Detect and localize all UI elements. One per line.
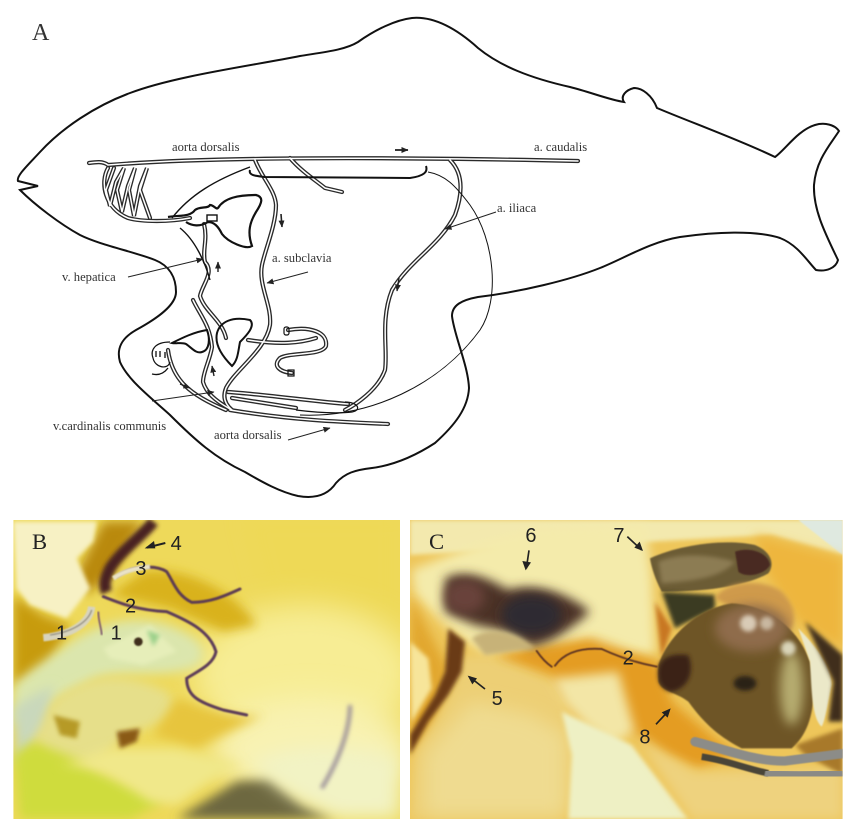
- vessel 2: [537, 649, 657, 667]
- leader arrows: [128, 150, 496, 440]
- vessel labels: aorta dorsalis: [172, 140, 240, 154]
- vessel labels: a. caudalis: [534, 140, 587, 154]
- vessel 2: [103, 597, 247, 715]
- forceps: [695, 742, 843, 761]
- number labels: 3: [135, 558, 146, 580]
- vessel labels: v. hepatica: [62, 270, 116, 284]
- number labels: 8: [639, 727, 650, 749]
- organs and thin vessels: [152, 166, 492, 415]
- photo tones: [410, 520, 843, 819]
- vessel labels: a. subclavia: [272, 251, 332, 265]
- number labels: [56, 533, 182, 645]
- vessels: black outer strokes: [89, 158, 578, 424]
- dark tissue 6: [445, 574, 590, 647]
- vessel labels: aorta dorsalis: [214, 428, 282, 442]
- panel label A: A: [32, 20, 50, 46]
- right dark and pale edges: [798, 628, 832, 727]
- vessel 3: [117, 567, 240, 602]
- fish body outline: [18, 18, 839, 497]
- number labels: 2: [125, 596, 136, 618]
- label B: B: [32, 529, 47, 554]
- pointer arrows: [469, 537, 669, 724]
- number labels: 4: [171, 533, 182, 555]
- vessels 1: [43, 607, 92, 638]
- panel A: fish circulatory diagram: [18, 18, 839, 497]
- arrow to vessel 4: [147, 543, 165, 548]
- number labels: 5: [492, 688, 503, 710]
- dark blood vessel 4: [105, 522, 153, 592]
- panel B: photograph of dissection: [13, 515, 413, 819]
- vessels: white inner strokes: [89, 158, 578, 424]
- organ 8: [658, 603, 814, 748]
- number labels: [492, 525, 650, 749]
- number labels: 1: [111, 623, 122, 645]
- photo tones: [13, 515, 413, 819]
- out-of-focus vessel: [322, 705, 350, 788]
- number labels: 1: [56, 623, 67, 645]
- dark vessel 5: [410, 628, 465, 755]
- organ 7: [650, 542, 772, 592]
- panel C: photograph of dissection: [410, 520, 843, 819]
- number labels: 7: [613, 525, 624, 547]
- vessel labels: v.cardinalis communis: [53, 419, 166, 433]
- number labels: 6: [525, 525, 536, 547]
- vessel labels: [53, 140, 587, 442]
- label C: C: [429, 529, 444, 554]
- vessel labels: a. iliaca: [497, 201, 537, 215]
- number labels: 2: [623, 647, 634, 669]
